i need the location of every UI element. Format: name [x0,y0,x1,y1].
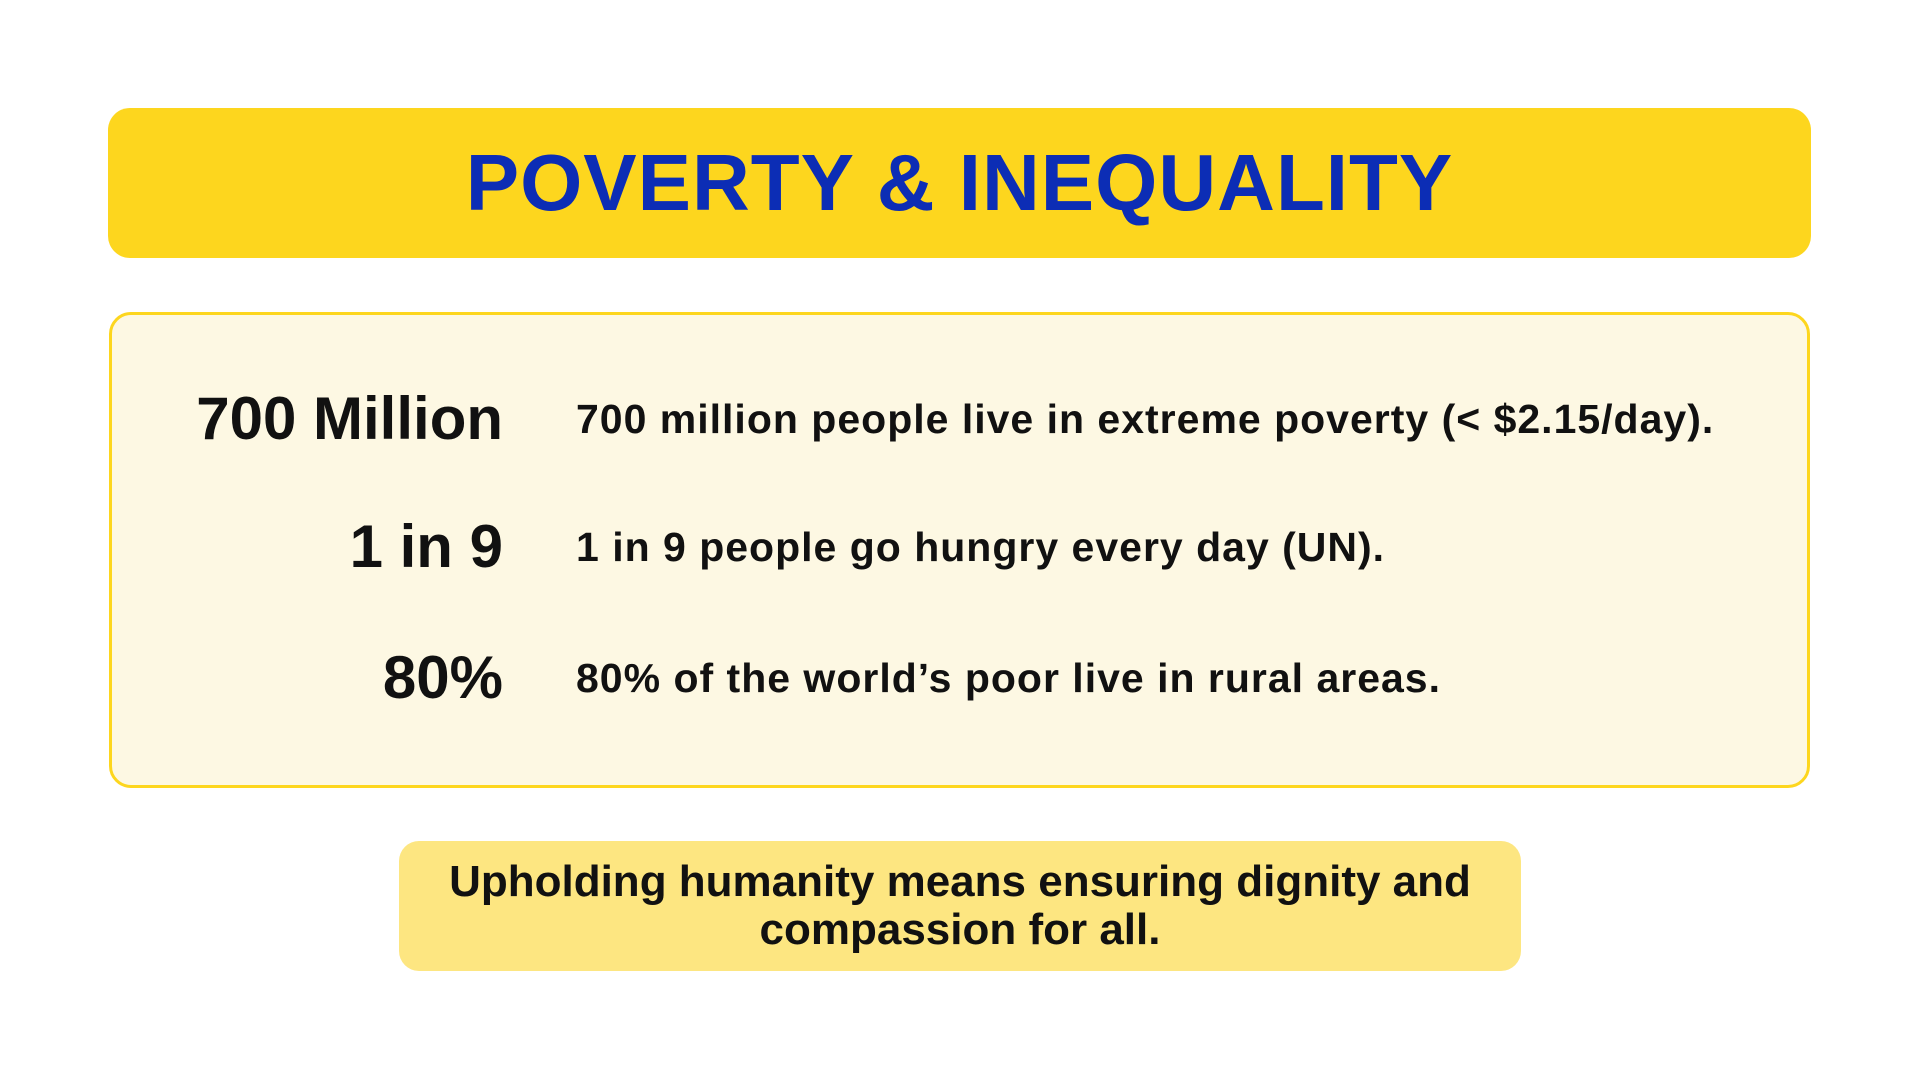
stat row: 1 in 9: 1 in 9 people go hungry every day (UN). [576,524,1385,570]
stat row: 1 in 9 [350,513,1385,580]
callout [399,841,1521,971]
stat row: 700 million [196,385,1714,452]
stat row: 700 million: 700 million people live in extreme poverty (< $2.15/day). [576,396,1714,442]
callout: Upholding humanity means ensuring dignity and [449,857,1471,906]
callout: compassion for all. [760,905,1160,954]
stat row: 80%: 80% of the world’s poor live in rural areas. [576,655,1441,701]
title [108,108,1811,258]
panel: statistics [109,312,1810,788]
stat row: 80% [383,644,1441,711]
title: POVERTY & INEQUALITY [466,138,1453,227]
stat row: 80%: 80% [383,644,503,711]
stat row: 700 million: 700 Million [196,385,503,452]
stat row: 1 in 9: 1 in 9 [350,513,503,580]
